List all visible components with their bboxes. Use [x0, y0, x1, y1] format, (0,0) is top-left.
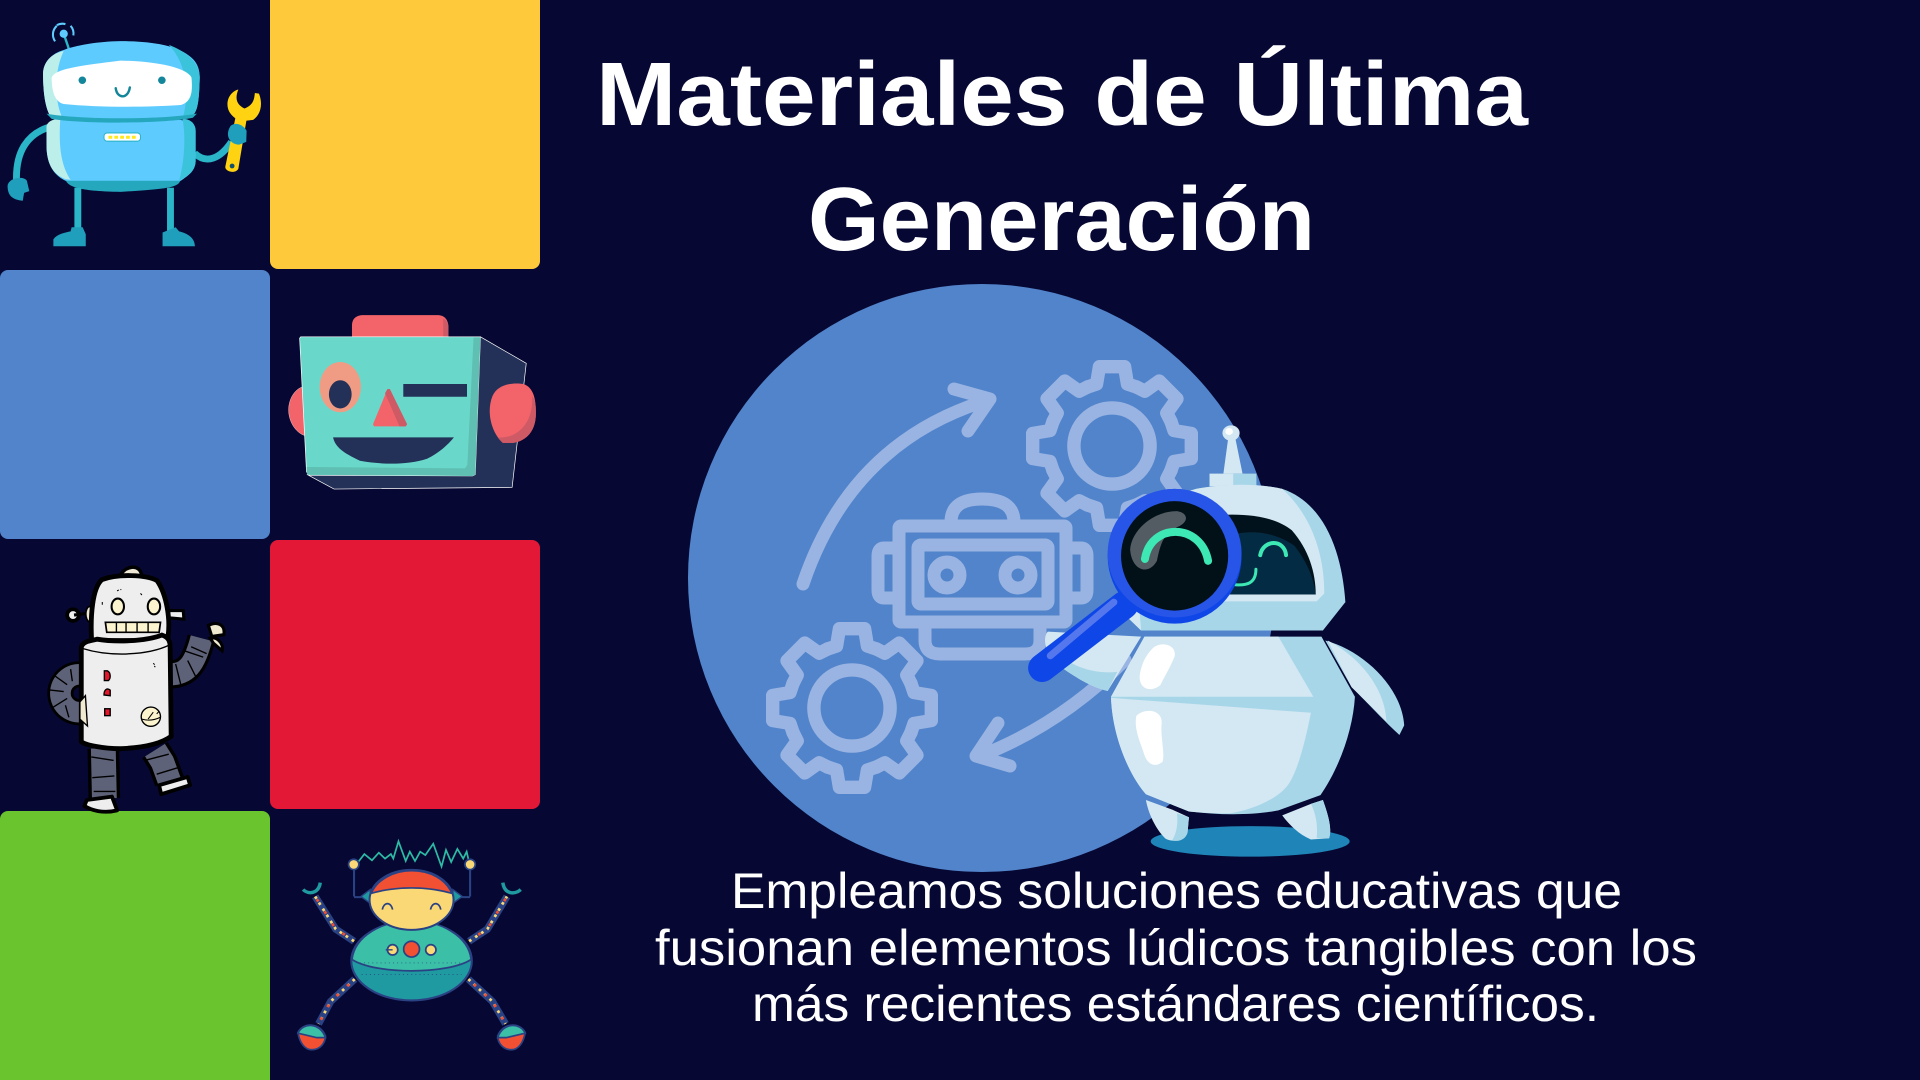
title — [596, 44, 1529, 270]
illustration: blue circle — [688, 284, 1276, 872]
body text — [655, 863, 1697, 1032]
icon: white cartoon robot — [48, 567, 224, 812]
tile: blue — [0, 270, 270, 539]
icon: blue robot with wrench — [8, 24, 261, 246]
body text: fusionan elementos lúdicos tangibles con los — [655, 920, 1697, 976]
title: Generación — [808, 170, 1315, 270]
icon: gears, robot and cycle arrows — [773, 367, 1191, 787]
body text: más recientes estándares científicos. — [752, 976, 1599, 1032]
title: Materiales de Última — [596, 44, 1529, 145]
tile: red — [270, 540, 540, 809]
illustration: robot with magnifying glass — [1042, 425, 1404, 857]
icon: teal robot head — [289, 315, 536, 489]
icon: teal spider-leg robot — [298, 841, 525, 1050]
tile: green — [0, 811, 270, 1080]
body text: Empleamos soluciones educativas que — [731, 863, 1622, 919]
tile: yellow — [270, 0, 540, 269]
